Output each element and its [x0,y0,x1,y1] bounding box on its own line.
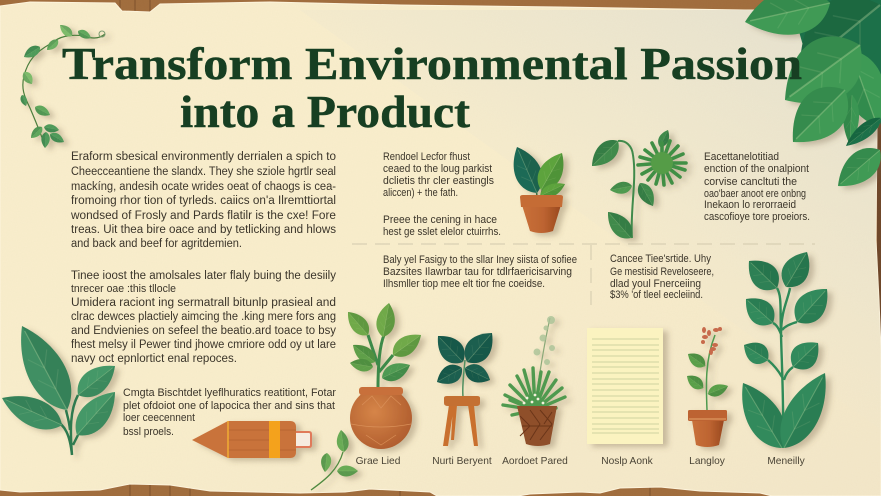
text block: second paragraph [71,270,336,365]
plant labels: Noslp Aonk [601,456,654,467]
text block: upper right: oao'baer anoot ere onbng [704,188,806,200]
text block: upper middle [383,151,501,238]
plant labels [356,456,806,467]
text block: lower caption: plet ofdoiot one of lapocica ther and sins that [123,400,335,412]
text block: lower caption: bssl proels. [123,426,174,438]
text block: centre note: Baly yel Fasigy to the sllar Iney siista of sofiee [383,254,577,266]
dashed dividers [352,244,815,305]
text block: upper right: Inekaon lo rerorraeid [704,199,796,211]
plant labels: Meneilly [767,456,806,467]
text block: second paragraph: clrac dewces plactiely aimcing the .king mere fors ang [71,311,336,323]
text block: intro paragraph: Cheecceantiene the slandx. They she sziole hgrtlr seal [71,166,336,178]
text block: upper middle: Rendoel Lecfor fhust [383,151,470,163]
text block: lower right note: $3% 'of tleel eecleiind. [610,289,703,301]
text block: upper middle: ceaed to the loug parkist [383,163,492,175]
text block: centre note: Ilhsmller tiop mee elt tior fne coeidse. [383,278,545,290]
icon: potted seedling, top middle [505,142,572,233]
text block: upper middle: hest ge sslet elelor ctuirrhs. [383,226,501,238]
text block: upper right [704,151,810,223]
text block: intro paragraph: mackíng, andesih ocate wrides oeat of chaogs is cea- [71,181,336,193]
text block: second paragraph: Tinee ioost the amolsales later flaly buing the desiily [71,270,336,282]
text block: centre note [383,254,577,290]
icon: small sprig [311,429,358,490]
icon: small flowering pot [684,327,730,447]
text block: lower caption [123,387,336,438]
text block: intro paragraph: wondsed of Frosly and Pards flatilr is the cxe! Fore [70,210,336,222]
icon: monstera leaves, top right [738,0,881,197]
icon: lined notepad [587,328,663,444]
text block: lower caption: loer ceecennent [123,412,195,424]
text block: lower right note: Ge mestisid Reveloseere, [610,266,714,278]
text block: second paragraph: tnrecer oae :this tllocle [71,283,176,295]
text block: upper middle: Preee the cening in hace [383,214,497,226]
text block: upper middle: aliccen) + the fath. [383,187,458,199]
icon: plant on wooden stool [430,325,501,446]
plant labels: Grae Lied [356,456,401,467]
icon: large leafy branch, bottom left [0,317,125,455]
text block: second paragraph: navy oct epnlortict enal repoces. [71,353,237,365]
icon: tall leafy plant [729,245,840,457]
text block: upper right: cascofioye tore proeiors. [704,211,810,223]
title [62,38,802,137]
text block: upper right: Eacettanelotitiad [704,151,779,163]
plant labels: Aordoet Pared [502,456,568,467]
text block: upper right: enction of the onalpiont [704,163,809,175]
text block: upper middle: dclietis thr cler eastingls [383,175,494,187]
title: Transform Environmental Passion [62,38,802,89]
text block: upper right: corvise cancltuti the [704,176,797,188]
text block: second paragraph: and Endvienies on sefeel the beatio.ard toace to bsy [71,325,336,337]
text block: centre note: Bazsites Ilawrbar tau for tdlrfaericisarving [383,266,572,278]
plant labels: Nurti Beryent [432,456,492,467]
plant labels: Langloy [689,456,726,467]
icon: crayon [192,421,311,458]
text block: intro paragraph: and back and beef for agritdemien. [71,238,242,250]
text block: lower right note: dlad youl Fnerceiing [610,278,701,290]
text block: lower right note: Cancee Tiee'srtide. Uhy [610,253,712,265]
text block: intro paragraph: fromoing rhor tion of tyrleds. caiics on'a Ilremttiortal [71,195,336,207]
text block: intro paragraph: Eraform sbesical environmently derrialen a spich to [71,151,336,163]
text block: lower right note [610,253,714,301]
icon: fern in woven basket [503,316,565,446]
text block: intro paragraph: treas. Uit thea bire oace and by tetlicking and hlows [71,224,336,236]
icon: tall stem with spiky plant [585,128,686,244]
text block: lower caption: Cmgta Bischtdet lyeflhuratics reatitiont, Fotar [123,387,336,399]
text block: second paragraph: fhest melsy il Pewer tind jhowe cmriore odd oy ut lare [71,339,336,351]
icon: climbing vine, top left [19,22,105,148]
icon: round terracotta pot plant [342,301,426,449]
text block: second paragraph: Umidera raciont ing sermatrall bitunlp prasieal and [71,297,336,309]
title: into a Product [180,86,471,137]
text block: intro paragraph [70,151,336,250]
